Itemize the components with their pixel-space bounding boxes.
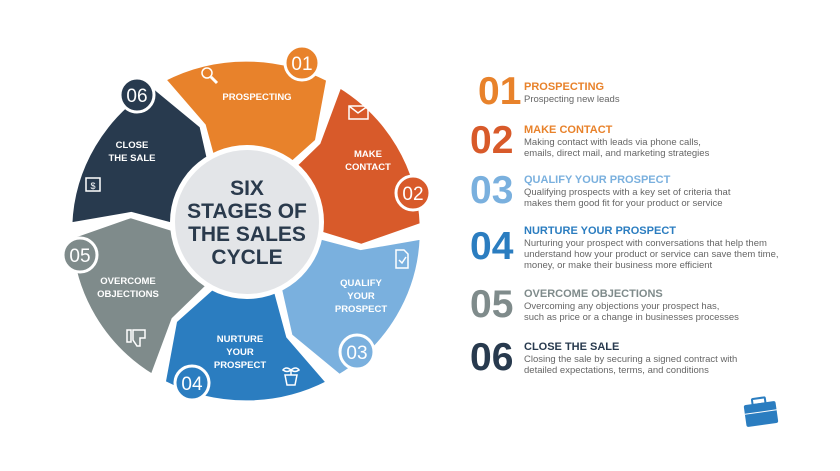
stage 04: Nurturing your prospect with conversations that help them (524, 238, 767, 249)
center circle: STAGES OF (187, 200, 307, 223)
stages list (470, 70, 779, 379)
segment labels (97, 92, 391, 371)
stage 03: makes them good fit for your product or service (524, 198, 723, 209)
center circle: THE SALES (188, 223, 306, 246)
segment labels: CONTACT (345, 162, 391, 173)
icons (86, 68, 408, 385)
segment labels: PROSPECT (335, 304, 387, 315)
segment: make contact (250, 75, 440, 275)
stage 06: Closing the sale by securing a signed contract with (524, 354, 737, 365)
segment labels: CLOSE (116, 140, 148, 151)
icons: $ (90, 181, 96, 191)
stage 03: 03 (470, 169, 513, 212)
stage 02: MAKE CONTACT (524, 124, 612, 136)
stage 04: 04 (470, 225, 513, 268)
cycle diagram: 05 (69, 246, 91, 267)
segment labels: PROSPECTING (222, 92, 292, 103)
segment labels: OBJECTIONS (97, 289, 159, 300)
segment: overcome (52, 187, 242, 387)
stage 01: 01 (478, 70, 521, 113)
stage 05: OVERCOME OBJECTIONS (524, 288, 663, 300)
segment: qualify (250, 187, 440, 387)
center circle (170, 145, 324, 299)
segment labels: OVERCOME (100, 276, 156, 287)
stage 04: understand how your product or service can save them time, (524, 249, 779, 260)
center circle: SIX (230, 177, 264, 200)
segment: close (52, 75, 242, 275)
stage 02 (470, 119, 709, 162)
center circle: CYCLE (211, 246, 283, 269)
stage 01 (478, 70, 620, 113)
cycle diagram: 01 (291, 54, 313, 75)
segment labels: MAKE (354, 149, 382, 160)
segment labels: YOUR (226, 347, 254, 358)
stage 01: PROSPECTING (524, 81, 604, 93)
segment labels: YOUR (347, 291, 375, 302)
stage 05: Overcoming any objections your prospect has, (524, 301, 719, 312)
stage 03: QUALIFY YOUR PROSPECT (524, 174, 670, 186)
cycle diagram: 04 (181, 374, 203, 395)
cycle diagram: 02 (402, 184, 424, 205)
stage 05 (470, 283, 739, 326)
stage 06 (470, 336, 737, 379)
number badges (63, 46, 430, 400)
stage 06: CLOSE THE SALE (524, 341, 619, 353)
stage 02: emails, direct mail, and marketing strategies (524, 148, 709, 159)
segment: prospecting (163, 59, 329, 180)
cycle diagram: 03 (346, 343, 368, 364)
stage 02: Making contact with leads via phone calls, (524, 137, 701, 148)
stage 05: such as price or a change in businesses processes (524, 312, 739, 323)
segment labels: THE SALE (109, 153, 155, 164)
stage 06: detailed expectations, terms, and conditions (524, 365, 709, 376)
stage 05: 05 (470, 283, 513, 326)
segment labels: QUALIFY (340, 278, 383, 289)
stage 03: Qualifying prospects with a key set of criteria that (524, 187, 730, 198)
stage 02: 02 (470, 119, 513, 162)
segment labels: NURTURE (217, 334, 263, 345)
stage 04: NURTURE YOUR PROSPECT (524, 225, 676, 237)
stage 03 (470, 169, 730, 212)
briefcase logo (743, 396, 778, 427)
stage 01: Prospecting new leads (524, 94, 620, 105)
segment: nurture (163, 282, 329, 403)
segment labels: PROSPECT (214, 360, 266, 371)
cycle diagram: 06 (126, 86, 148, 107)
stage 06: 06 (470, 336, 513, 379)
stage 04 (470, 225, 779, 271)
stage 04: money, or make their business more efficient (524, 260, 712, 271)
